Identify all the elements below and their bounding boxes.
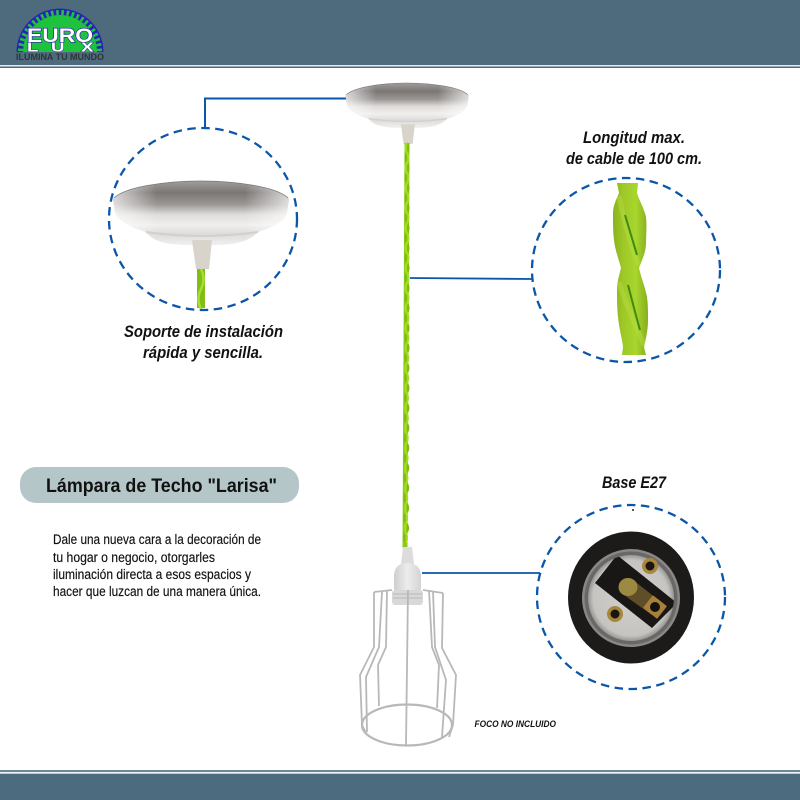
dashed outline <box>537 505 725 689</box>
lamp holder <box>392 547 423 605</box>
enlarged cable <box>198 269 204 309</box>
product title pill <box>20 467 299 503</box>
enlarged rose <box>113 181 289 269</box>
caption: ceiling rose: rápida y sencilla. <box>143 343 263 362</box>
dashed outline <box>109 128 297 310</box>
screw hole upper <box>642 558 658 574</box>
description text: Dale una nueva cara a la decoración de <box>53 532 261 547</box>
caption: cable length: Longitud max. <box>583 128 685 147</box>
description text <box>53 532 261 599</box>
twisted green cable <box>404 143 408 548</box>
footer band <box>0 770 800 800</box>
logo: Eurolux <box>16 8 104 60</box>
detail circle: E27 socket <box>537 505 725 689</box>
small dot <box>632 509 634 511</box>
description text: tu hogar o negocio, otorgarles <box>53 550 215 565</box>
description text: hacer que luzcan de una manera única. <box>53 584 261 599</box>
dashed outline <box>532 178 720 362</box>
caption: ceiling rose <box>124 322 283 362</box>
brass contact <box>622 579 662 615</box>
connector: cable to detail circle <box>410 278 532 279</box>
caption: ceiling rose: Soporte de instalación <box>124 322 283 341</box>
logo wordmark LUX: LUX <box>27 41 94 55</box>
caption: cable length <box>566 128 702 168</box>
screw hole lower <box>607 606 623 622</box>
lamp product photo <box>346 83 469 746</box>
detail circle: ceiling rose <box>109 128 297 310</box>
base label: Base E27 <box>602 473 667 492</box>
ceiling rose <box>346 83 469 144</box>
logo tagline: ILUMINA TU MUNDO <box>16 52 104 63</box>
header band <box>0 0 800 68</box>
product title pill: Lámpara de Techo "Larisa" <box>46 476 277 497</box>
connector: socket to detail circle <box>422 572 540 574</box>
bulb not included note: FOCO NO INCLUIDO <box>474 719 557 730</box>
caption: cable length: de cable de 100 cm. <box>566 149 702 168</box>
detail circle: cable <box>532 178 720 362</box>
logo sunburst <box>16 8 104 52</box>
wire cage <box>360 590 456 746</box>
logo wordmark EURO: EURO <box>27 26 93 47</box>
socket photo <box>568 532 694 664</box>
enlarged twisted cable <box>613 183 648 355</box>
connector: ceiling rose to detail circle <box>205 98 346 128</box>
description text: iluminación directa a esos espacios y <box>53 567 251 582</box>
